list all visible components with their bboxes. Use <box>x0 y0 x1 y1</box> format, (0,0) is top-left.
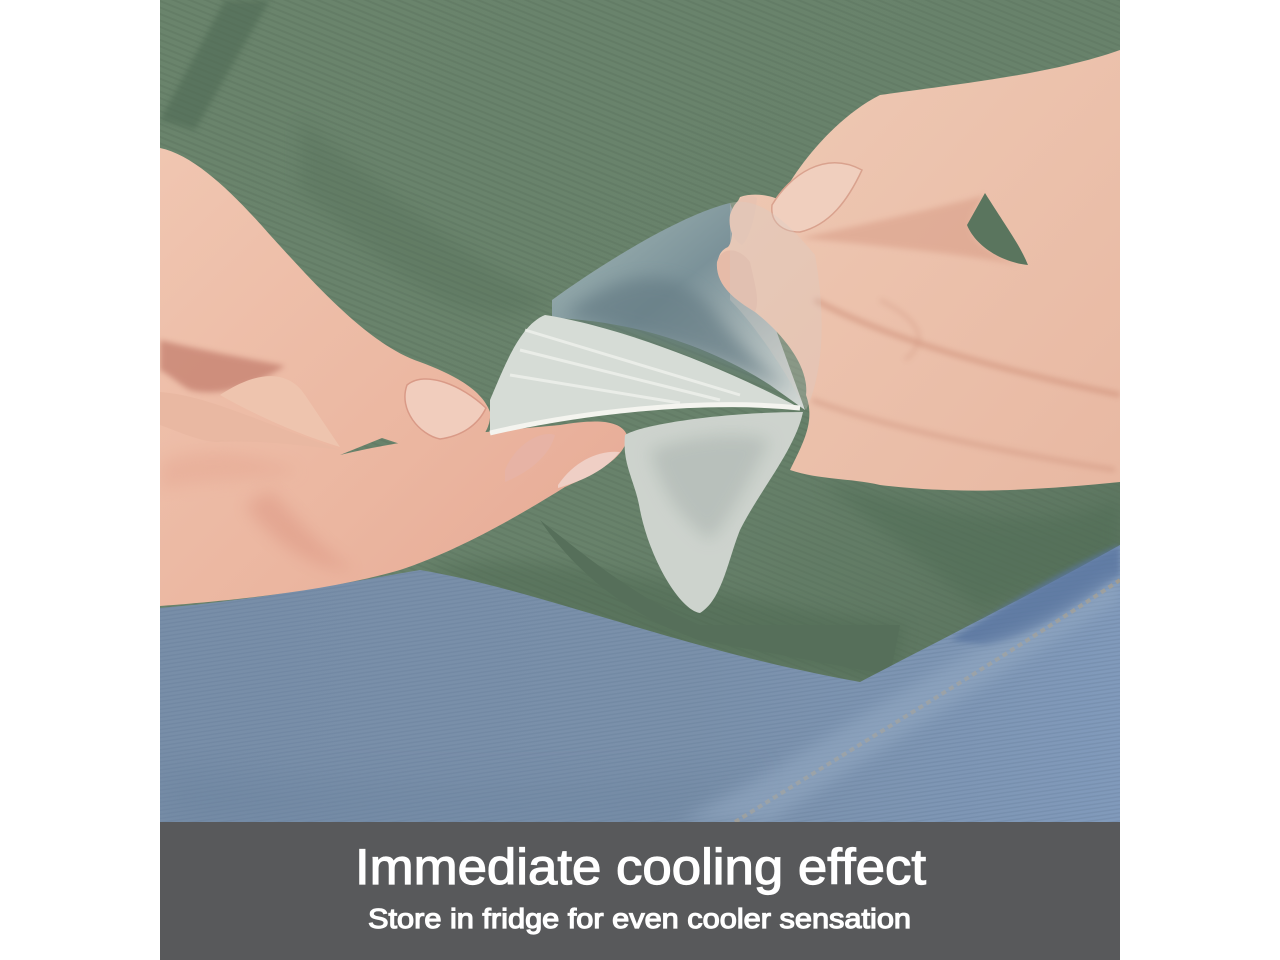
fingernails <box>505 434 555 482</box>
photo: left hand <box>160 148 627 606</box>
heading: Immediate cooling effect <box>355 839 926 895</box>
thumbnail <box>405 379 486 439</box>
finger creases <box>815 300 1120 395</box>
subheading: Store in fridge for even cooler sensation <box>368 903 911 934</box>
finger tips seen through film <box>730 200 738 234</box>
photo: right hand <box>717 50 1120 491</box>
thumbnail <box>772 163 862 232</box>
infographic photo and caption <box>160 0 1120 960</box>
photo: clipped scene <box>160 0 1120 822</box>
caption banner <box>160 822 1120 960</box>
photo: jeans <box>160 545 1120 822</box>
photo: gel patch <box>490 203 805 613</box>
photo: background clothing <box>160 0 1120 682</box>
film over fingers <box>730 202 822 410</box>
